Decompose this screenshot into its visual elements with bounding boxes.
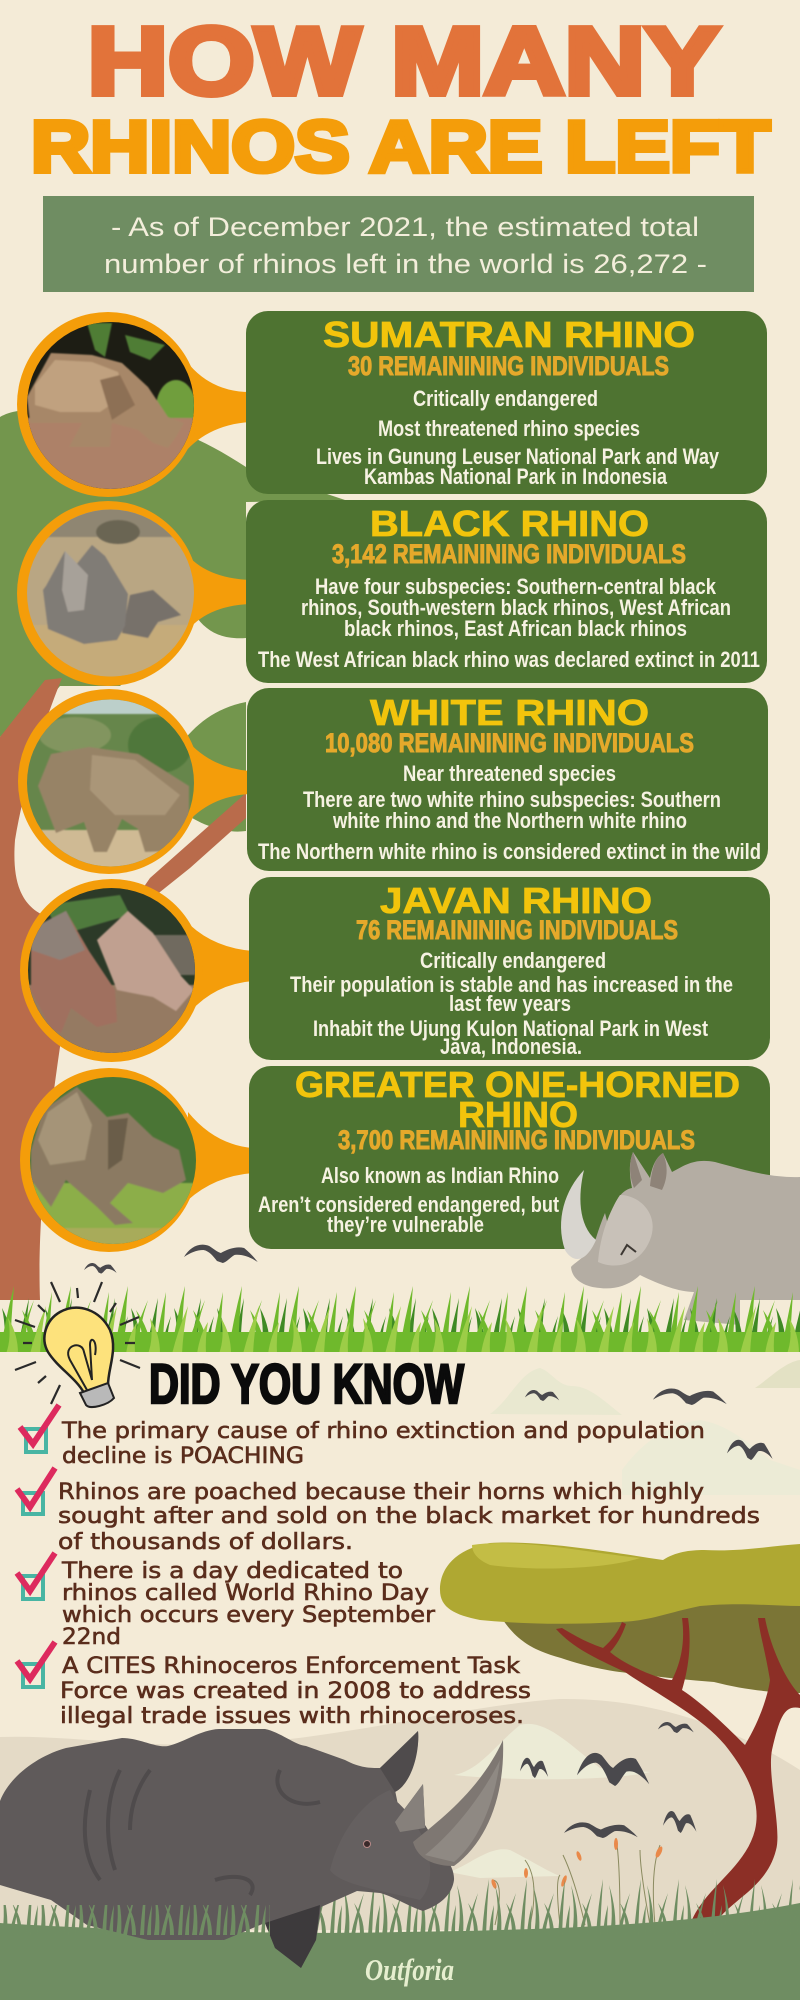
panel: Javan rhino: Critically endangered	[420, 948, 606, 973]
list item: World Rhino Day: rhinos called World Rhino Day	[62, 1581, 429, 1606]
acacia tree	[440, 1543, 800, 1928]
canopy blob behind white rhino	[180, 702, 246, 832]
panel: Sumatran rhino: Critically endangered	[413, 386, 598, 411]
panel: Greater one-horned rhino: Aren’t considered endangered, but	[258, 1192, 560, 1217]
grass band	[0, 1282, 800, 1352]
list item: World Rhino Day	[17, 1553, 436, 1650]
panel: Greater one-horned rhino	[188, 1064, 770, 1249]
panel: Black rhino: 3,142 REMAININING INDIVIDUALS	[332, 539, 686, 569]
panel: Sumatran rhino: Lives in Gunung Leuser National Park and Way	[316, 444, 720, 469]
bird	[653, 1388, 727, 1405]
panel: White rhino: Near threatened species	[403, 761, 616, 786]
title: HOW MANY	[88, 8, 720, 115]
list item: World Rhino Day: There is a day dedicated to	[61, 1559, 403, 1584]
connector	[190, 925, 253, 1012]
panel: Greater one-horned rhino: GREATER ONE-HORNED	[295, 1064, 740, 1105]
bird	[525, 1390, 559, 1401]
subtitle banner: number of rhinos left in the world is 26,272 -	[104, 249, 707, 279]
lower clouds	[449, 1724, 650, 1878]
panel: Greater one-horned rhino: RHINO	[458, 1094, 578, 1135]
panel: Javan rhino: Java, Indonesia.	[440, 1034, 582, 1059]
bird	[84, 1263, 117, 1274]
photo: Greater one-horned rhino	[20, 1068, 200, 1253]
orange reeds	[490, 1838, 664, 1925]
panel: Greater one-horned rhino: they’re vulnerable	[327, 1212, 484, 1237]
main horn	[413, 1740, 503, 1866]
panel: Black rhino: BLACK RHINO	[370, 503, 649, 544]
panel: Javan rhino: 76 REMAININING INDIVIDUALS	[356, 915, 678, 945]
panel: Sumatran rhino	[180, 311, 767, 494]
icon: checkbox	[17, 1553, 55, 1599]
icon: checkbox	[17, 1642, 55, 1687]
body	[0, 1729, 454, 1968]
list item: poaching	[20, 1405, 705, 1469]
connector	[188, 1112, 253, 1200]
icon: checkbox	[20, 1405, 59, 1452]
photo: Black rhino	[17, 501, 200, 686]
bird	[577, 1753, 649, 1786]
photo: Sumatran rhino	[17, 312, 200, 497]
lower canopy	[503, 1600, 800, 1693]
bird	[184, 1245, 258, 1263]
list item: CITES task force: Force was created in 2008 to address	[60, 1679, 531, 1704]
list item: CITES task force: illegal trade issues with rhinoceroses.	[60, 1704, 524, 1729]
grass tufts on ground	[300, 1875, 800, 1935]
panel: Javan rhino	[190, 877, 770, 1060]
panel: Javan rhino: Inhabit the Ujung Kulon National Park in West	[313, 1016, 709, 1041]
list item: horns: sought after and sold on the black market for hundreds	[58, 1504, 760, 1529]
panel: White rhino: 10,080 REMAININING INDIVIDUALS	[325, 728, 694, 758]
photo: Javan rhino	[20, 879, 205, 1065]
bird	[564, 1822, 638, 1838]
rhino illustration: dark grey	[0, 1729, 503, 1968]
connector	[185, 552, 250, 634]
upper canopy	[440, 1543, 800, 1624]
bird	[727, 1440, 773, 1460]
nose horn	[395, 1784, 425, 1832]
icon: checkbox	[17, 1468, 55, 1514]
list item: CITES task force	[17, 1642, 531, 1729]
panel: Javan rhino: last few years	[449, 991, 571, 1016]
panel: White rhino: WHITE RHINO	[370, 692, 649, 733]
panel: Black rhino: rhinos, South-western black rhinos, West African	[301, 595, 731, 620]
branches and trunk	[556, 1618, 800, 1928]
panel: Sumatran rhino: Kambas National Park in Indonesia	[364, 464, 668, 489]
panel: Javan rhino: JAVAN RHINO	[380, 880, 652, 921]
title	[31, 8, 770, 188]
bird	[658, 1722, 694, 1733]
panel: Sumatran rhino: Most threatened rhino species	[378, 416, 640, 441]
panel: Sumatran rhino: SUMATRAN RHINO	[323, 314, 695, 355]
panel: Black rhino	[185, 500, 767, 683]
tree canopy behind species cards	[0, 409, 345, 737]
eye	[364, 1840, 370, 1848]
list item: horns	[17, 1468, 760, 1555]
list item: horns: Rhinos are poached because their horns which highly	[58, 1480, 704, 1505]
list item: poaching: The primary cause of rhino extinction and population	[61, 1419, 705, 1444]
grass tufts in front of rhino	[0, 1905, 270, 1940]
panel: Greater one-horned rhino: Also known as Indian Rhino	[321, 1163, 559, 1188]
panel: White rhino: white rhino and the Northern white rhino	[332, 808, 687, 833]
ground	[0, 1903, 800, 2000]
rhino illustration: watercolor grey	[561, 1152, 800, 1325]
ear	[380, 1731, 418, 1792]
photo: White rhino	[18, 689, 200, 875]
panel: Black rhino: Have four subspecies: Southern-central black	[315, 574, 717, 599]
connector	[185, 738, 250, 825]
logo: Outforia: Outforia	[365, 1952, 454, 1987]
connector	[180, 352, 250, 458]
panel: Greater one-horned rhino: 3,700 REMAININING INDIVIDUALS	[338, 1125, 695, 1155]
bird	[663, 1811, 696, 1833]
list item: World Rhino Day: which occurs every September	[62, 1603, 436, 1628]
canopy highlight	[472, 1543, 640, 1569]
subtitle banner: - As of December 2021, the estimated total	[111, 212, 699, 242]
shading	[265, 1905, 320, 1968]
list item: CITES task force: A CITES Rhinoceros Enforcement Task	[62, 1654, 520, 1679]
panel: Sumatran rhino: 30 REMAININING INDIVIDUALS	[348, 351, 669, 381]
lower background hills	[0, 1699, 800, 1930]
panel: Black rhino: black rhinos, East African black rhinos	[344, 616, 687, 641]
subtitle banner	[43, 196, 754, 292]
title: RHINOS ARE LEFT	[31, 108, 770, 188]
list item: horns: of thousands of dollars.	[58, 1530, 353, 1555]
heading: did you know: DID YOU KNOW	[149, 1352, 464, 1415]
icon: light bulb	[15, 1282, 140, 1407]
list item: poaching: decline is POACHING	[62, 1444, 304, 1469]
bird	[520, 1758, 548, 1778]
clouds	[490, 1360, 800, 1495]
list item: World Rhino Day: 22nd	[62, 1625, 121, 1650]
panel: White rhino	[185, 688, 768, 871]
panel: White rhino: There are two white rhino subspecies: Southern	[303, 787, 721, 812]
tree trunk and branches	[0, 678, 246, 1300]
